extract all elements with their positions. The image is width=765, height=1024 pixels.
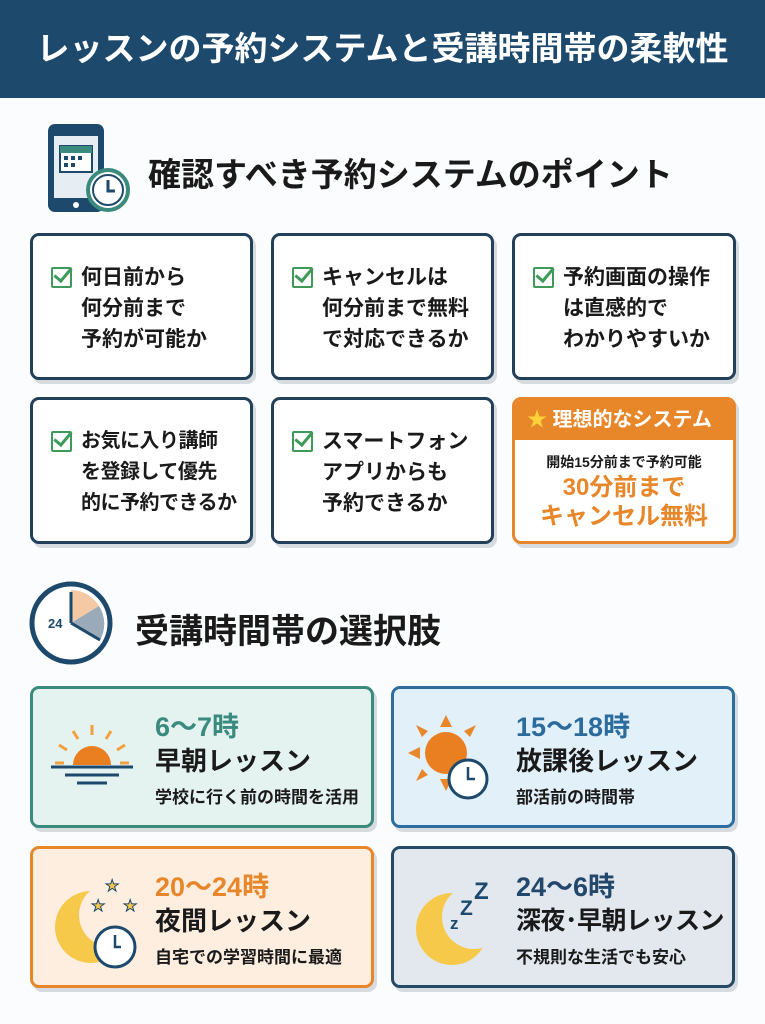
time card: night: 20〜24時 <box>155 872 269 902</box>
card 5 <box>271 397 494 544</box>
time card: late night: 24〜6時 <box>516 872 615 902</box>
icon: moon with clock: ★ <box>123 896 137 915</box>
card 3: 予約画面の操作 <box>563 266 710 289</box>
card 4: を登録して優先 <box>81 461 217 483</box>
card 5: アプリからも <box>322 461 448 484</box>
icon: moon with clock: ★ <box>105 876 119 895</box>
card 4: お気に入り講師 <box>81 430 218 452</box>
card 2: で対応できるか <box>322 328 469 351</box>
time card: late night: 深夜･早朝レッスン <box>516 907 724 935</box>
heading: time slots: 受講時間帯の選択肢 <box>135 613 441 651</box>
icon: sun with clock <box>408 715 488 800</box>
ideal header: ★ 理想的なシステム <box>527 409 712 431</box>
time card: late night <box>391 846 735 988</box>
icon: sunrise <box>51 725 133 784</box>
icon: phone calendar <box>48 124 130 212</box>
card 3: は直感的で <box>563 297 668 320</box>
time card: early morning: 6〜7時 <box>155 712 239 742</box>
card: ideal system: 開始15分前まで予約可能 <box>546 454 702 470</box>
title: レッスンの予約システムと受講時間帯の柔軟性 <box>36 30 728 67</box>
time card: after school: 部活前の時間帯 <box>516 788 635 807</box>
card 1: 何日前から <box>81 266 186 289</box>
ideal header <box>515 400 733 440</box>
time card: night: 夜間レッスン <box>155 906 311 936</box>
icon: 24h clock <box>30 582 112 664</box>
card 1: 何分前まで <box>81 297 186 320</box>
icon: moon with clock <box>55 876 138 968</box>
time card: night: 自宅での学習時間に最適 <box>155 948 342 967</box>
time card: after school: 放課後レッスン <box>516 746 698 776</box>
time card: late night: 不規則な生活でも安心 <box>516 948 686 967</box>
card 1 <box>30 233 253 380</box>
card 2: 何分前まで無料 <box>322 297 469 320</box>
time card: early morning <box>30 686 374 828</box>
card 3 <box>512 233 736 380</box>
title <box>0 0 765 98</box>
card 1: 予約が可能か <box>81 328 207 351</box>
card 5: スマートフォン <box>322 430 468 453</box>
card 2 <box>271 233 494 380</box>
card: ideal system: キャンセル無料 <box>540 503 708 530</box>
time card: night <box>30 846 374 988</box>
time card: after school <box>391 686 735 828</box>
time card: early morning: 学校に行く前の時間を活用 <box>155 788 359 807</box>
card: ideal system <box>512 397 736 544</box>
card 4: 的に予約できるか <box>81 492 237 514</box>
time card: early morning: 早朝レッスン <box>155 746 311 776</box>
icon: moon with clock: ★ <box>91 896 105 915</box>
card 4 <box>30 397 253 544</box>
icon: sleeping moon: z <box>450 914 458 933</box>
card: ideal system: 30分前まで <box>563 474 685 501</box>
card 5: 予約できるか <box>322 492 448 515</box>
time card: after school: 15〜18時 <box>516 712 630 742</box>
icon: sleeping moon <box>416 878 489 965</box>
card 2: キャンセルは <box>322 266 448 289</box>
icon: sleeping moon: Z <box>460 897 473 920</box>
icon: 24h clock: 24 <box>48 616 63 631</box>
icon: sleeping moon: Z <box>474 878 489 905</box>
heading: reservation points: 確認すべき予約システムのポイント <box>148 156 673 193</box>
card 3: わかりやすいか <box>563 328 710 351</box>
